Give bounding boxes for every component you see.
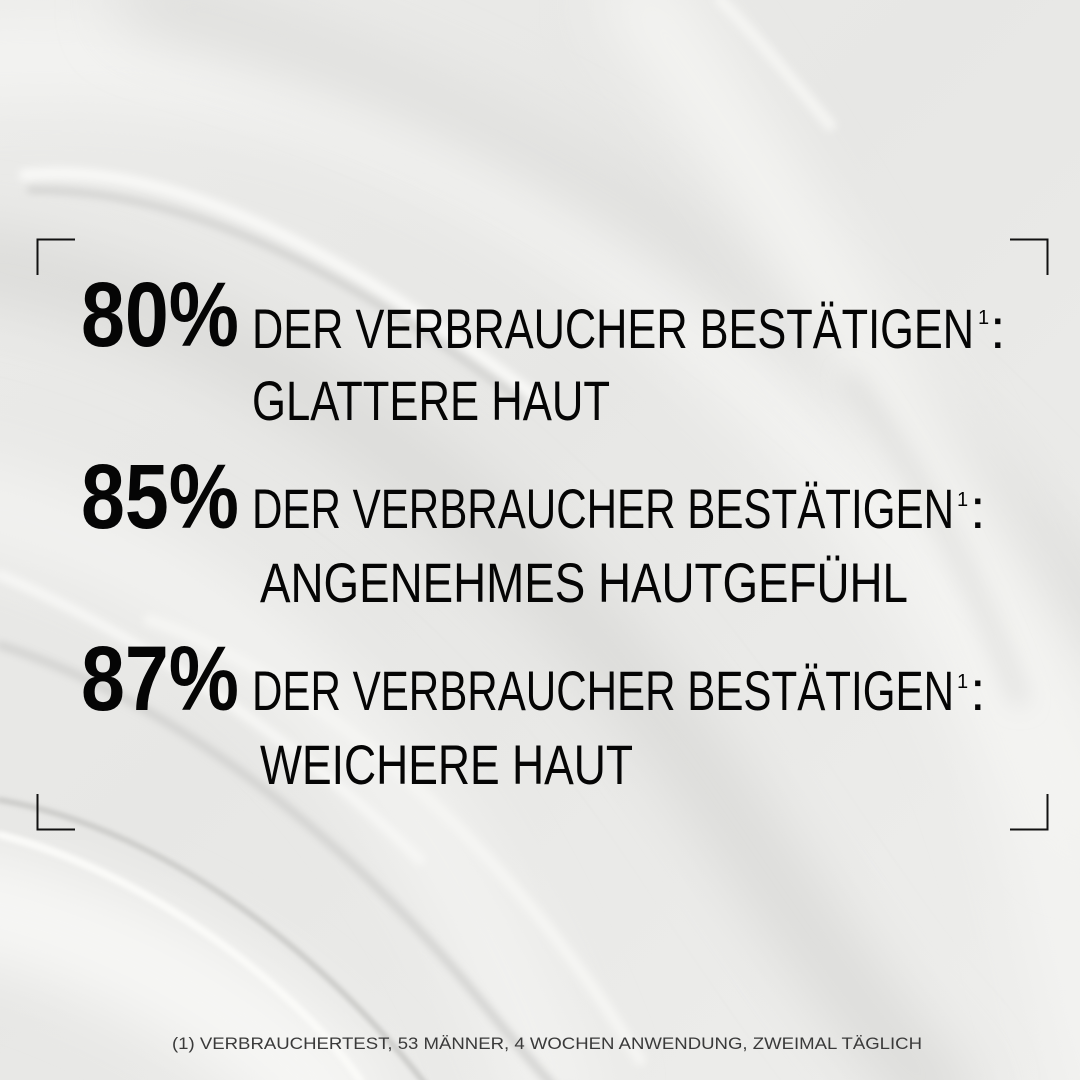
statement: 80 percent smoother skin: 80% <box>81 264 239 366</box>
statement: 85 percent pleasant skin feel: 1 <box>957 489 968 511</box>
statement: 80 percent smoother skin: : <box>990 297 1006 360</box>
statement: 87 percent softer skin <box>81 628 986 796</box>
statement: 80 percent smoother skin <box>81 264 1006 432</box>
statement: 87 percent softer skin: 1 <box>957 671 968 693</box>
statement: 80 percent smoother skin: 1 <box>978 307 989 329</box>
statement: 85 percent pleasant skin feel: ANGENEHMES HAUTGEFÜHL <box>260 551 908 614</box>
statement: 85 percent pleasant skin feel <box>81 446 986 614</box>
statement: 85 percent pleasant skin feel: : <box>970 477 986 540</box>
corner bracket: bottom right <box>1010 794 1048 830</box>
corner bracket: top left <box>38 240 75 275</box>
footnote: (1) VERBRAUCHERTEST, 53 MÄNNER, 4 WOCHEN ANWENDUNG, ZWEIMAL TÄGLICH <box>172 1034 922 1053</box>
statement: 85 percent pleasant skin feel: 85% <box>81 446 239 548</box>
corner bracket: top right <box>1010 240 1048 275</box>
statement: 80 percent smoother skin: GLATTERE HAUT <box>252 369 610 432</box>
statement: 87 percent softer skin: WEICHERE HAUT <box>260 733 633 796</box>
corner bracket: bottom left <box>38 794 75 830</box>
statement: 87 percent softer skin: 87% <box>81 628 239 730</box>
statement: 87 percent softer skin: : <box>970 659 986 722</box>
